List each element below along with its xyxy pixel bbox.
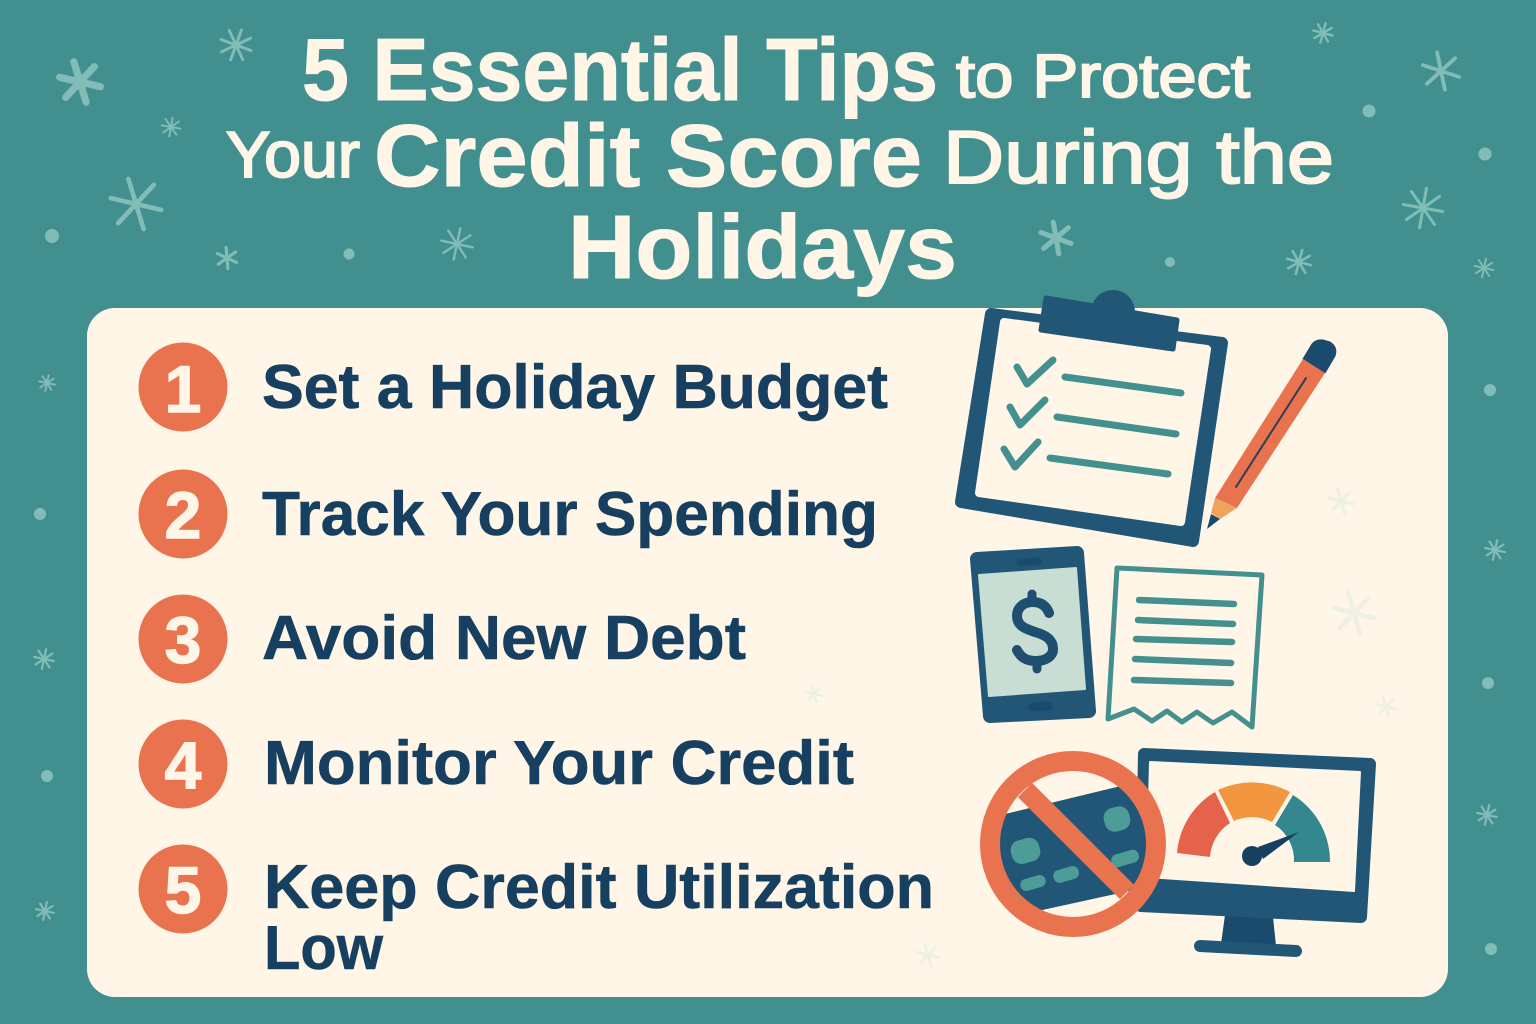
tip 2 xyxy=(138,470,878,558)
tip 5: 5 xyxy=(165,853,201,927)
icon: pencil xyxy=(1207,340,1336,529)
tip 1 xyxy=(138,342,888,432)
tip 4 xyxy=(138,720,854,808)
title: to Protect xyxy=(956,42,1250,110)
gauge needle xyxy=(1242,832,1299,866)
tip 2: Track Your Spending xyxy=(262,480,878,549)
gauge orange segment xyxy=(1218,782,1290,822)
tip 3 xyxy=(138,594,746,684)
tip 3: 3 xyxy=(165,603,201,677)
tip 2: 2 xyxy=(165,478,201,552)
title: Credit Score xyxy=(374,106,922,205)
title: Your xyxy=(226,118,360,191)
gauge red segment xyxy=(1177,792,1230,857)
title xyxy=(226,20,1334,298)
icon: receipt xyxy=(1108,568,1262,727)
tip 5 xyxy=(138,844,934,983)
icon: monitor with credit gauge xyxy=(1141,754,1370,951)
tip 1: Set a Holiday Budget xyxy=(262,353,888,422)
tip 5: Keep Credit Utilization xyxy=(264,853,934,922)
tip 4: 4 xyxy=(165,728,202,802)
title: During the xyxy=(943,115,1334,199)
title: 5 Essential Tips xyxy=(302,20,938,119)
tip 1: 1 xyxy=(165,352,201,426)
icon: prohibited credit card xyxy=(960,761,1170,928)
icon: phone with dollar xyxy=(977,553,1089,716)
tip 4: Monitor Your Credit xyxy=(264,729,854,798)
icon: clipboard checklist xyxy=(961,290,1222,541)
gauge teal segment xyxy=(1275,795,1330,862)
tip 3: Avoid New Debt xyxy=(262,604,746,673)
title: Holidays xyxy=(568,198,957,298)
tip 5: Low xyxy=(264,914,384,983)
faint panel snowflakes xyxy=(804,488,1398,967)
panel: tips xyxy=(87,308,1448,997)
